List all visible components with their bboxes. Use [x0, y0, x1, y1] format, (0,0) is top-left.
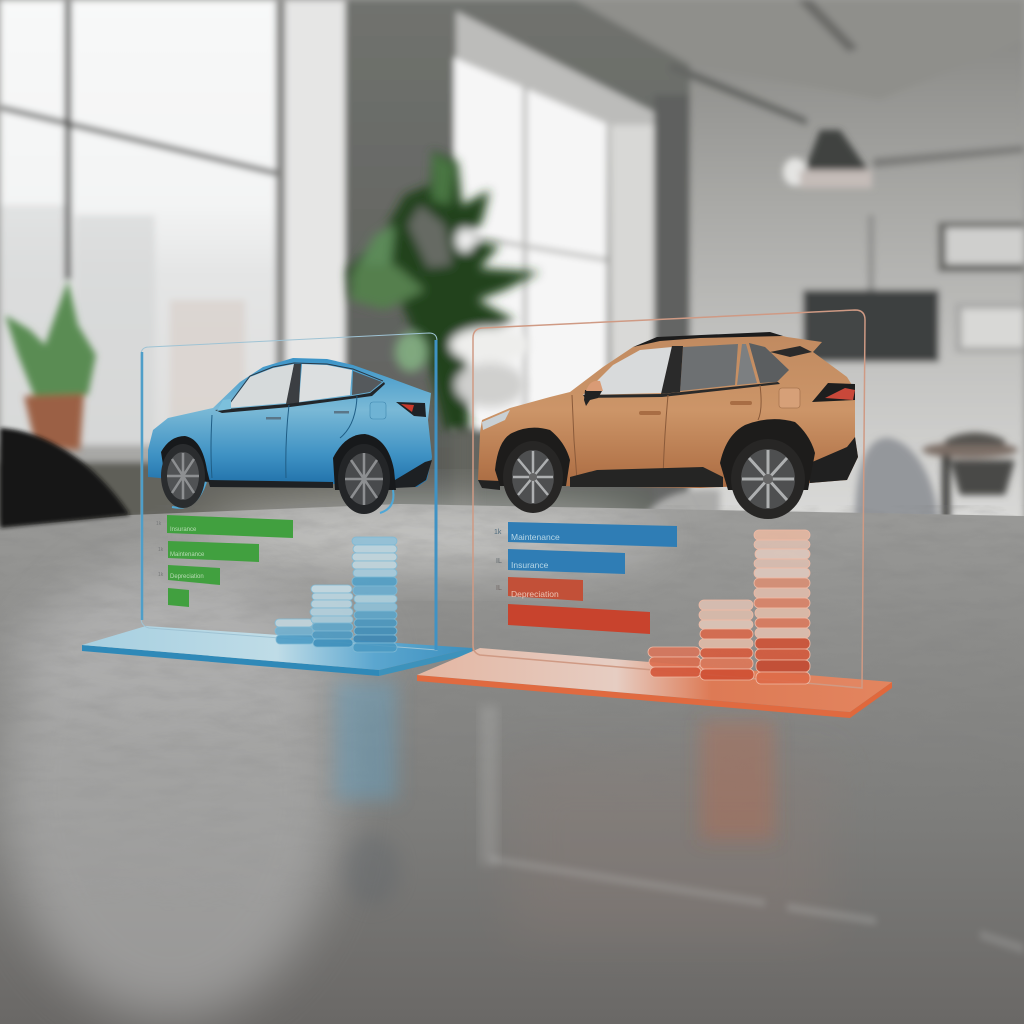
orange panel bar chart: Maintenance: [511, 532, 560, 542]
middle orange stack: [699, 600, 754, 680]
panel: orange car cost card: [417, 310, 892, 718]
roof rail: [633, 332, 783, 347]
short orange stack: [648, 647, 701, 677]
door seams and handles: [572, 385, 761, 480]
blue panel bar chart: Maintenance: [170, 552, 205, 558]
orange acrylic base: [417, 648, 892, 718]
orange glass panel: [473, 310, 865, 688]
orange panel bar chart: Depreciation: [511, 589, 559, 599]
table reflections: [335, 680, 775, 840]
orange panel bar chart: IL: [496, 558, 502, 565]
mirror and charge port: [217, 399, 231, 411]
windows: [583, 347, 672, 395]
ceiling: [575, 0, 1024, 100]
tall orange stack: [754, 530, 810, 684]
centre window frame: [456, 11, 654, 437]
lower trim: [570, 467, 723, 487]
blue acrylic base: [82, 626, 472, 676]
central dark wall: [345, 0, 690, 520]
room background: [0, 0, 1024, 530]
orange panel bar chart: 1k: [494, 529, 502, 536]
blurred centre plant: [347, 150, 540, 510]
headlight: [482, 410, 510, 430]
mirror: [584, 390, 602, 406]
blue panel bar chart: 1k: [158, 547, 164, 553]
orange coin stacks: [648, 530, 810, 684]
blue panel bar chart: 1k: [158, 572, 164, 578]
pendant lamp: [783, 130, 872, 188]
panel: blue car cost card: [82, 333, 472, 676]
orange panel bar chart: IL: [496, 585, 502, 592]
rear wheel: [333, 434, 396, 514]
middle blue stack: [310, 585, 353, 647]
blue coin stacks: [275, 537, 397, 652]
blue panel bar chart: [156, 515, 293, 607]
white column: [285, 0, 345, 460]
right furniture: [645, 432, 1018, 522]
car body: [478, 333, 858, 488]
blue panel bar chart: Insurance: [170, 527, 197, 533]
right wall: [690, 40, 1024, 530]
tall blue stack: [352, 537, 397, 652]
table surface: [0, 504, 1024, 1024]
front wheel: [495, 428, 570, 513]
blue glass panel: [141, 333, 437, 650]
wall frames and board: [803, 215, 1024, 362]
front wheel: [161, 436, 210, 508]
lower trim: [208, 480, 333, 488]
left potted plant: [5, 280, 96, 450]
door seams and handles: [211, 396, 357, 478]
dark chair back: [0, 428, 130, 528]
orange panel bar chart: Insurance: [511, 560, 549, 570]
car body: [148, 358, 432, 487]
orange car: [478, 332, 858, 519]
left window: [0, 0, 285, 455]
blue panel bar chart: 1k: [156, 521, 162, 527]
windows: [227, 364, 294, 408]
rear wheel: [720, 419, 815, 519]
blue car: [148, 358, 432, 514]
blue panel bar chart: Depreciation: [170, 574, 204, 580]
orange panel bar chart: [494, 522, 677, 634]
window sill and under-window wall: [0, 445, 345, 522]
tail light: [396, 402, 426, 417]
short blue stack: [275, 619, 314, 644]
tail light: [812, 383, 855, 402]
